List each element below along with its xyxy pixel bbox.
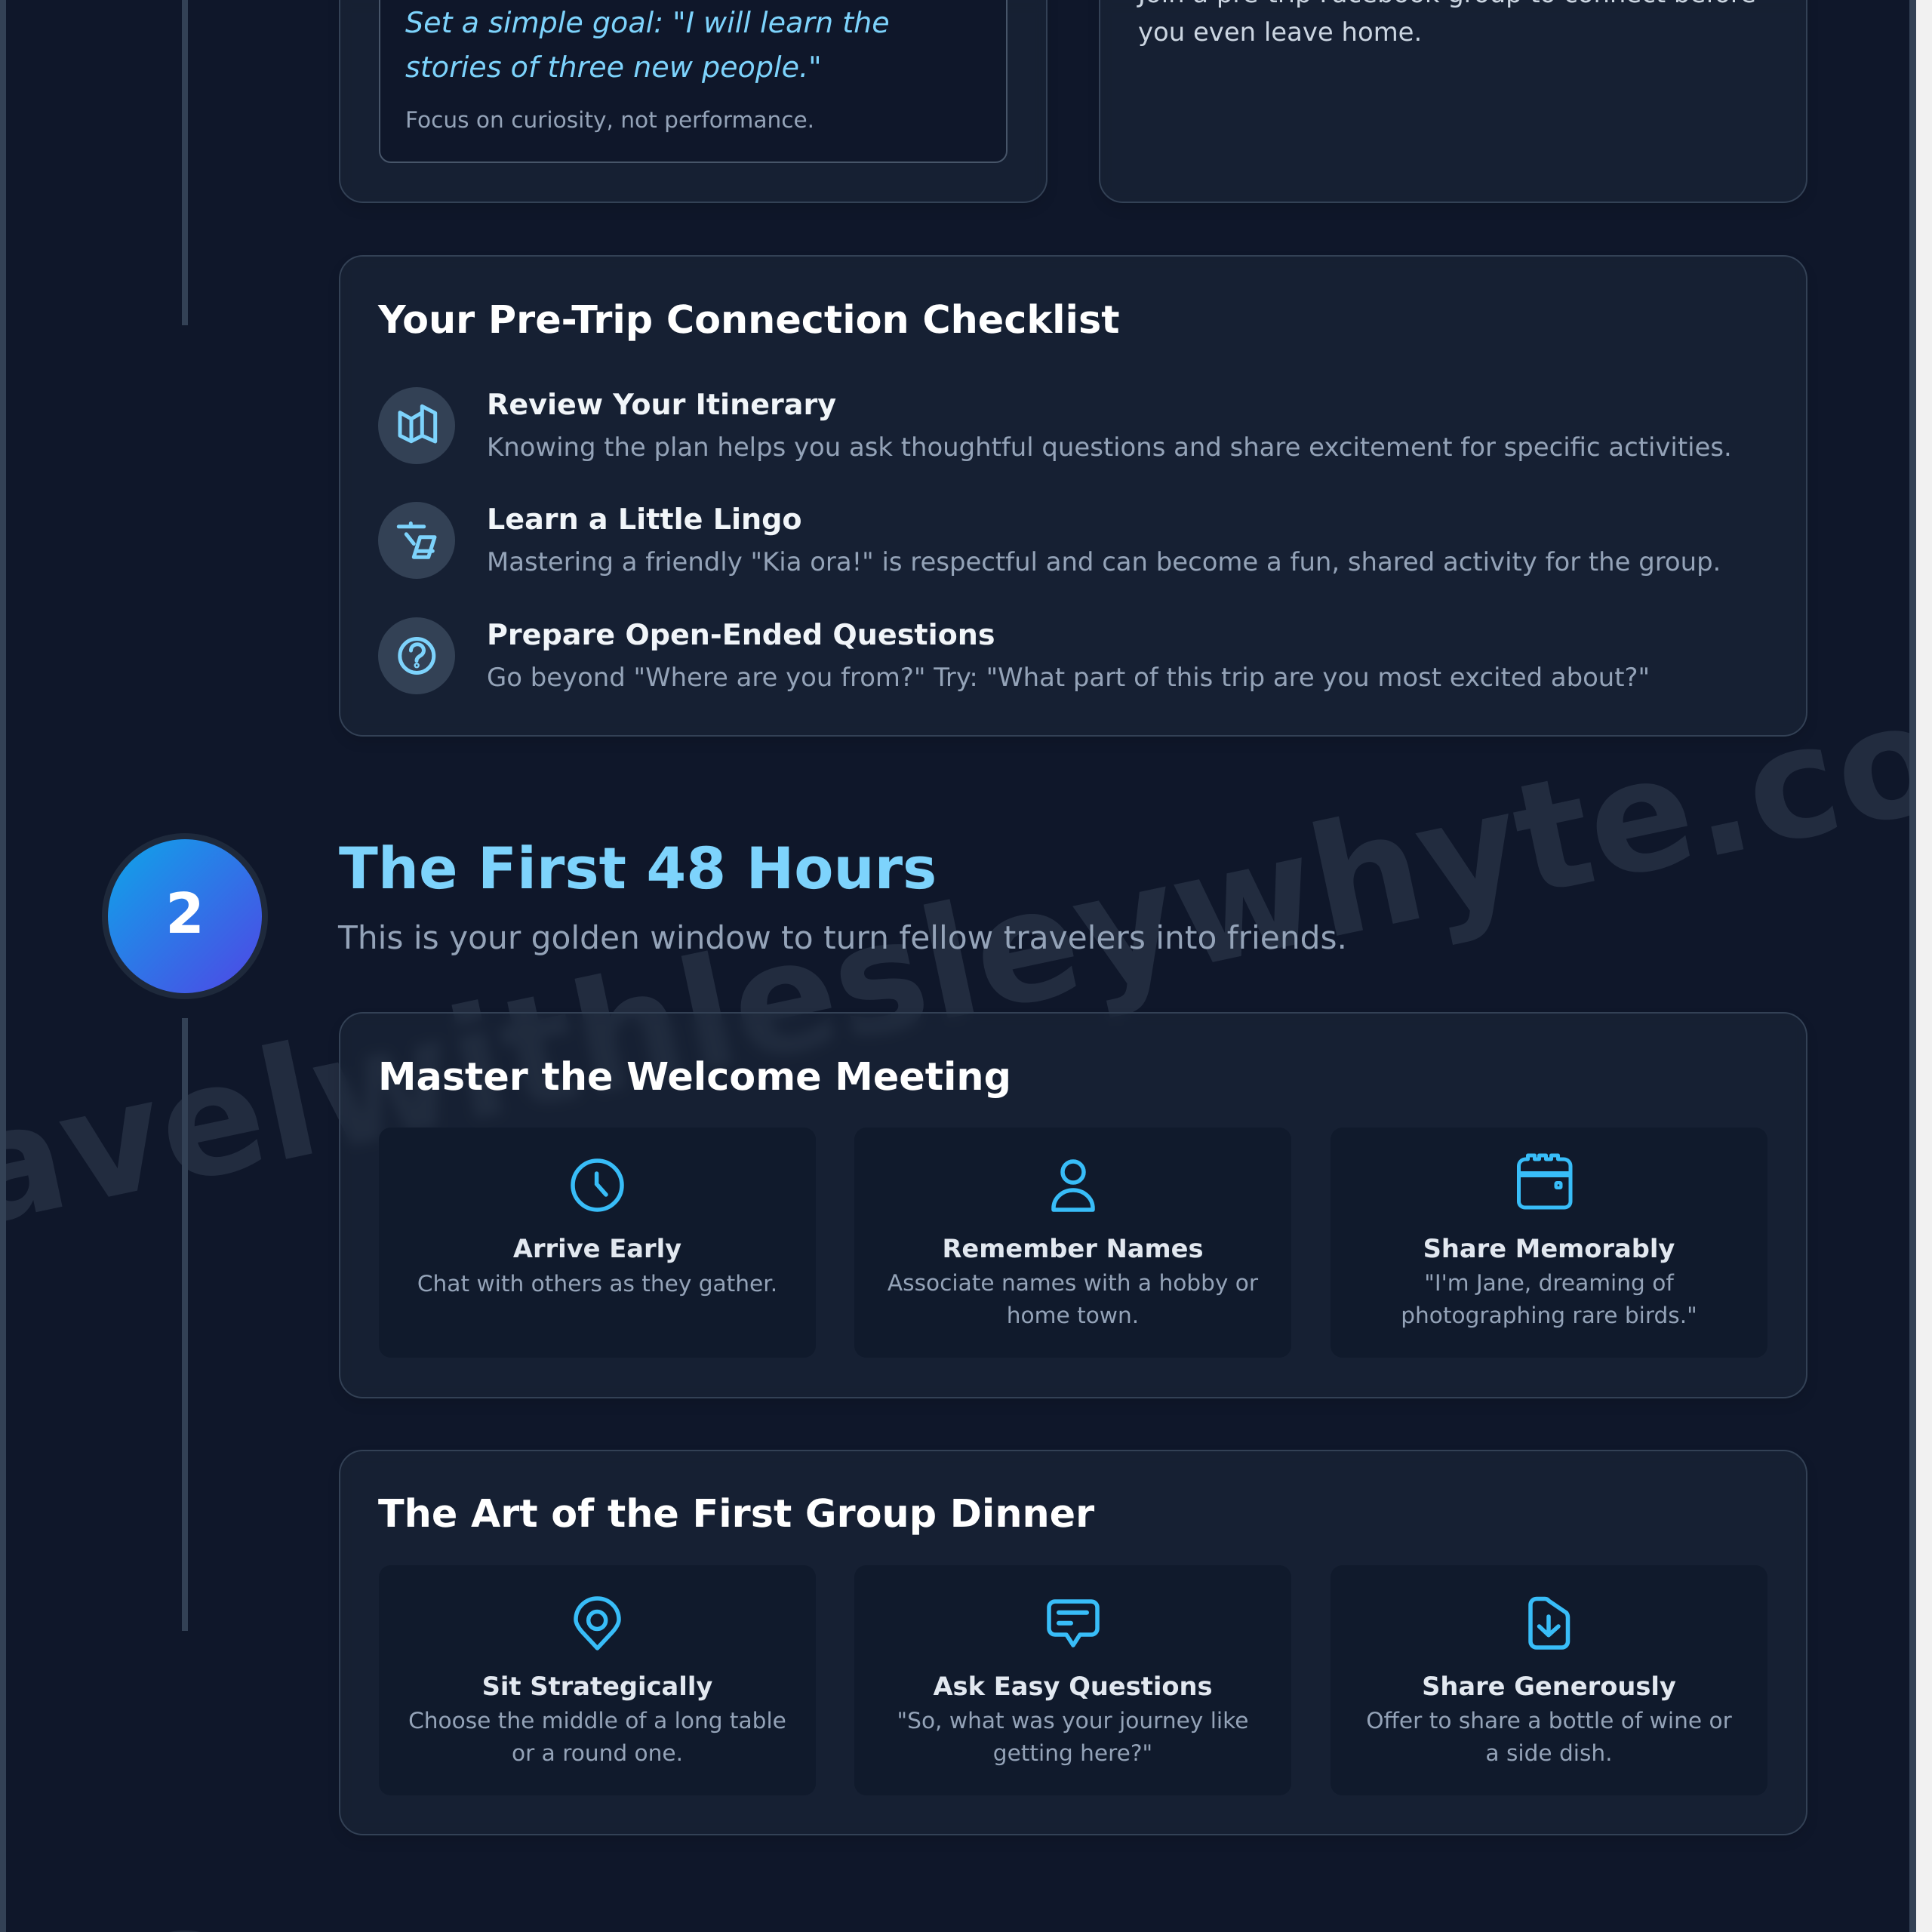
tip text: share generously: Offer to share a bottle of wine or xyxy=(1366,1708,1732,1734)
checklist item text 3: Go beyond "Where are you from?" Try: "What part of this trip are you most excited about?" xyxy=(487,663,1650,692)
section subtitle: This is your golden window to turn fellow travelers into friends. xyxy=(338,919,1347,956)
tip card: remember names xyxy=(854,1128,1291,1358)
heading: welcome meeting: Master the Welcome Meeting xyxy=(378,1054,1011,1099)
checklist item title 1: Review Your Itinerary xyxy=(487,388,836,421)
callout: simple goal box xyxy=(379,0,1008,163)
icon: clock xyxy=(571,1158,624,1212)
tip text: ask easy questions: getting here?" xyxy=(993,1740,1152,1766)
tip title: arrive early: Arrive Early xyxy=(513,1233,681,1263)
icon: map xyxy=(378,387,455,464)
goal quote text xyxy=(405,6,890,84)
tip text: remember names: home town. xyxy=(1007,1303,1139,1328)
panel: goal card xyxy=(339,0,1048,203)
tip text: ask easy questions: "So, what was your journey like xyxy=(897,1708,1248,1734)
step number badge xyxy=(108,839,262,993)
pre-trip group text: you even leave home. xyxy=(1138,17,1422,47)
checklist item title 3: Prepare Open-Ended Questions xyxy=(487,618,995,651)
tip text: share memorably: "I'm Jane, dreaming of xyxy=(1424,1270,1674,1296)
tip title: remember names: Remember Names xyxy=(942,1233,1204,1263)
frame edge: left xyxy=(0,0,6,1932)
tip title: ask easy questions: Ask Easy Questions xyxy=(933,1671,1213,1701)
panel: first group dinner xyxy=(339,1449,1807,1835)
tip text: arrive early: Chat with others as they gather. xyxy=(417,1271,777,1297)
tip title: share generously: Share Generously xyxy=(1422,1671,1676,1701)
icon: calendar xyxy=(1517,1153,1573,1209)
icon: question circle xyxy=(378,617,455,694)
tip card: ask easy questions xyxy=(854,1565,1291,1795)
tip text: share generously xyxy=(1366,1708,1732,1766)
tip text: sit strategically: Choose the middle of a long table xyxy=(408,1708,786,1734)
tip text: share memorably: photographing rare birds." xyxy=(1401,1303,1697,1328)
tip text: remember names: Associate names with a hobby or xyxy=(888,1270,1258,1296)
panel: master the welcome meeting xyxy=(339,1012,1807,1398)
tip text: sit strategically xyxy=(408,1708,786,1766)
icon: pin xyxy=(574,1596,621,1651)
goal quote text: stories of three new people." xyxy=(405,51,822,84)
tip card: share generously xyxy=(1331,1565,1767,1795)
icon: file download xyxy=(1528,1597,1570,1650)
checklist item title 2: Learn a Little Lingo xyxy=(487,503,802,536)
tip card: arrive early xyxy=(379,1128,816,1358)
goal note: Focus on curiosity, not performance. xyxy=(405,107,814,133)
timeline line: section 2 xyxy=(182,1018,188,1631)
step number badge: 2 xyxy=(165,881,205,946)
tip text: ask easy questions xyxy=(897,1708,1248,1766)
tip title: share memorably: Share Memorably xyxy=(1423,1233,1675,1263)
checklist item text 1: Knowing the plan helps you ask thoughtful questions and share excitement for specific activities. xyxy=(487,432,1732,462)
tip card: sit strategically xyxy=(379,1565,816,1795)
tip text: sit strategically: or a round one. xyxy=(512,1740,683,1766)
heading: checklist: Your Pre-Trip Connection Checklist xyxy=(378,297,1119,342)
pre-trip group text xyxy=(1137,0,1756,47)
icon: translate xyxy=(378,502,455,579)
icon: person xyxy=(1051,1159,1095,1212)
checklist item text 2: Mastering a friendly "Kia ora!" is respectful and can become a fun, shared activity for the group. xyxy=(487,547,1721,577)
heading: group dinner: The Art of the First Group Dinner xyxy=(378,1491,1094,1536)
tip text: remember names xyxy=(888,1270,1259,1328)
goal quote text: Set a simple goal: "I will learn the xyxy=(405,6,890,39)
frame edge: right xyxy=(1909,0,1916,1932)
tip title: sit strategically: Sit Strategically xyxy=(482,1671,712,1701)
panel: pre-trip connection checklist xyxy=(339,255,1807,737)
tip text: share generously: a side dish. xyxy=(1485,1740,1613,1766)
timeline line: section 1 xyxy=(182,0,188,325)
tip card: share memorably xyxy=(1331,1128,1767,1358)
section title: The First 48 Hours xyxy=(339,835,937,902)
icon: chat bubble xyxy=(1047,1599,1100,1647)
tip text: share memorably xyxy=(1401,1270,1697,1328)
panel: pre-trip group card xyxy=(1099,0,1807,203)
